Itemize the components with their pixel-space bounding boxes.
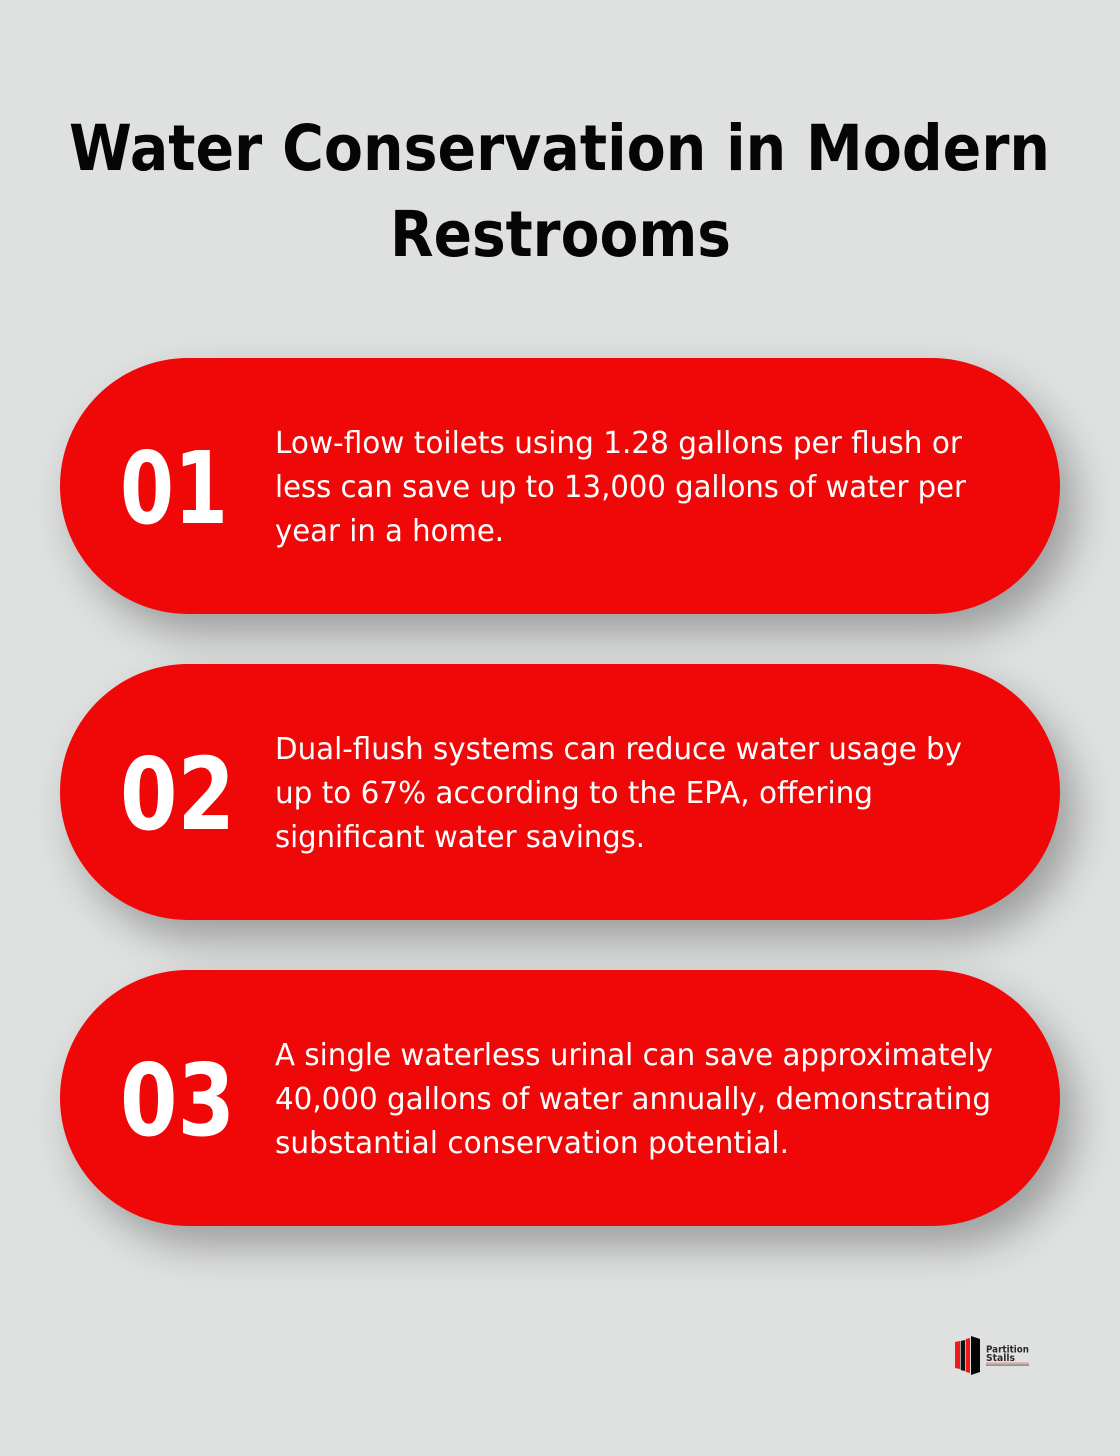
text: waterless urinal: A single waterless urinal can save approximately (275, 1038, 993, 1073)
title (69, 112, 1050, 271)
text: dual-flush systems: Dual-flush systems can reduce water usage by (275, 732, 962, 767)
text: low-flow toilets: year in a home. (275, 514, 504, 549)
title: Restrooms (390, 198, 731, 271)
text: low-flow toilets (275, 426, 967, 549)
text: dual-flush systems: up to 67% according to the EPA, offering (275, 776, 873, 811)
icon: stall panels (955, 1336, 980, 1375)
panel: card 01 low-flow toilets (60, 358, 1060, 614)
text: low-flow toilets: Low-flow toilets using 1.28 gallons per flush or (275, 426, 963, 461)
number 01: 01 (120, 430, 228, 547)
text: dual-flush systems: significant water savings. (275, 820, 645, 855)
logo wordmark (986, 1344, 1029, 1364)
text: dual-flush systems (275, 732, 962, 855)
text: waterless urinal: substantial conservation potential. (275, 1126, 789, 1161)
logo wordmark: Partition (986, 1344, 1029, 1356)
panel: card 03 waterless urinal (60, 970, 1060, 1226)
number 03: 03 (120, 1042, 235, 1159)
text: waterless urinal: 40,000 gallons of water annually, demonstrating (275, 1082, 991, 1117)
logo wordmark: Stalls (986, 1353, 1015, 1364)
number 02: 02 (120, 736, 235, 853)
panel: card 02 dual-flush systems (60, 664, 1060, 920)
text: low-flow toilets: less can save up to 13,000 gallons of water per (275, 470, 967, 505)
logo: Partition Stalls (955, 1336, 1029, 1375)
text: waterless urinal (275, 1038, 993, 1161)
